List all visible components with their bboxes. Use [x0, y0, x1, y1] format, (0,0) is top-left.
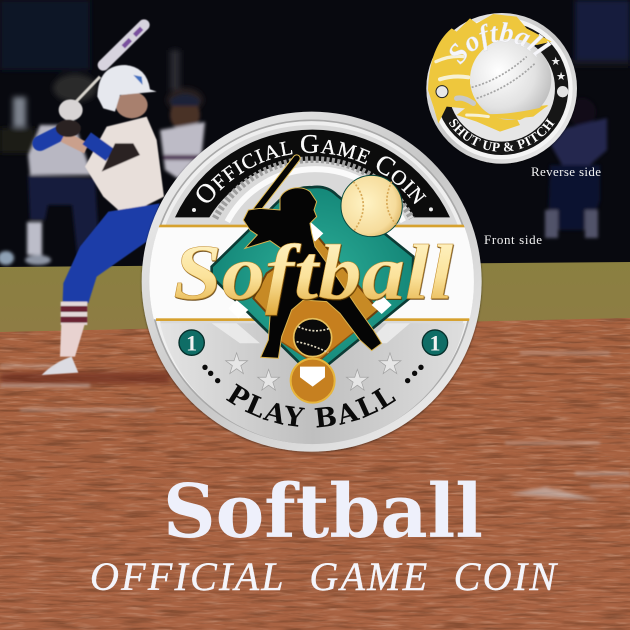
white base squares	[372, 295, 392, 314]
badge 1 right: 1	[429, 331, 440, 356]
badge 1 right	[422, 330, 448, 356]
gold ball	[341, 175, 402, 237]
stars: ★	[256, 363, 282, 397]
stars	[224, 346, 403, 397]
batter in background	[40, 25, 164, 375]
lower silver panel	[160, 323, 465, 444]
sitting player right	[545, 98, 607, 238]
badge 1 left: 1	[186, 331, 197, 356]
reverse side coin	[426, 13, 577, 164]
play ball arc: PLAY BALL	[226, 383, 396, 428]
reverse: gold flames	[428, 14, 552, 132]
infield shadow	[0, 372, 170, 384]
stars: ★	[224, 346, 250, 380]
batter silhouette	[243, 158, 382, 358]
home plate circle	[291, 359, 335, 403]
dots	[202, 365, 424, 383]
beaded inner ring	[215, 160, 412, 218]
reverse: silver ball	[470, 39, 551, 120]
coin title arc: OFFICIAL GAME COIN	[196, 134, 426, 204]
stars: ★	[344, 363, 370, 397]
subtitle: OFFICIAL GAME COIN	[90, 554, 558, 599]
reverse: flame highlights	[436, 56, 488, 117]
reverse: softball script: Softball	[450, 22, 552, 65]
badge 1 left	[179, 330, 204, 356]
reverse side coin: ★	[556, 69, 566, 83]
brown infield	[253, 237, 378, 364]
front side coin	[140, 112, 483, 454]
black banner arc	[175, 130, 450, 217]
reverse: motto: SHUT UP & PITCH	[449, 118, 554, 152]
main title: Softball	[163, 469, 483, 555]
teal diamond	[212, 187, 413, 377]
inner mound	[278, 298, 357, 363]
stars: ★	[377, 346, 403, 380]
label: reverse side: Reverse side	[531, 164, 601, 179]
white band	[140, 225, 485, 321]
softball word: Softball	[173, 229, 453, 316]
label: front side: Front side	[484, 232, 542, 247]
sitting player centre	[160, 94, 205, 180]
reverse: stars: ★	[551, 54, 561, 68]
reverse: badges	[436, 86, 448, 98]
mini softball	[294, 319, 332, 357]
sitting player left	[0, 125, 100, 265]
